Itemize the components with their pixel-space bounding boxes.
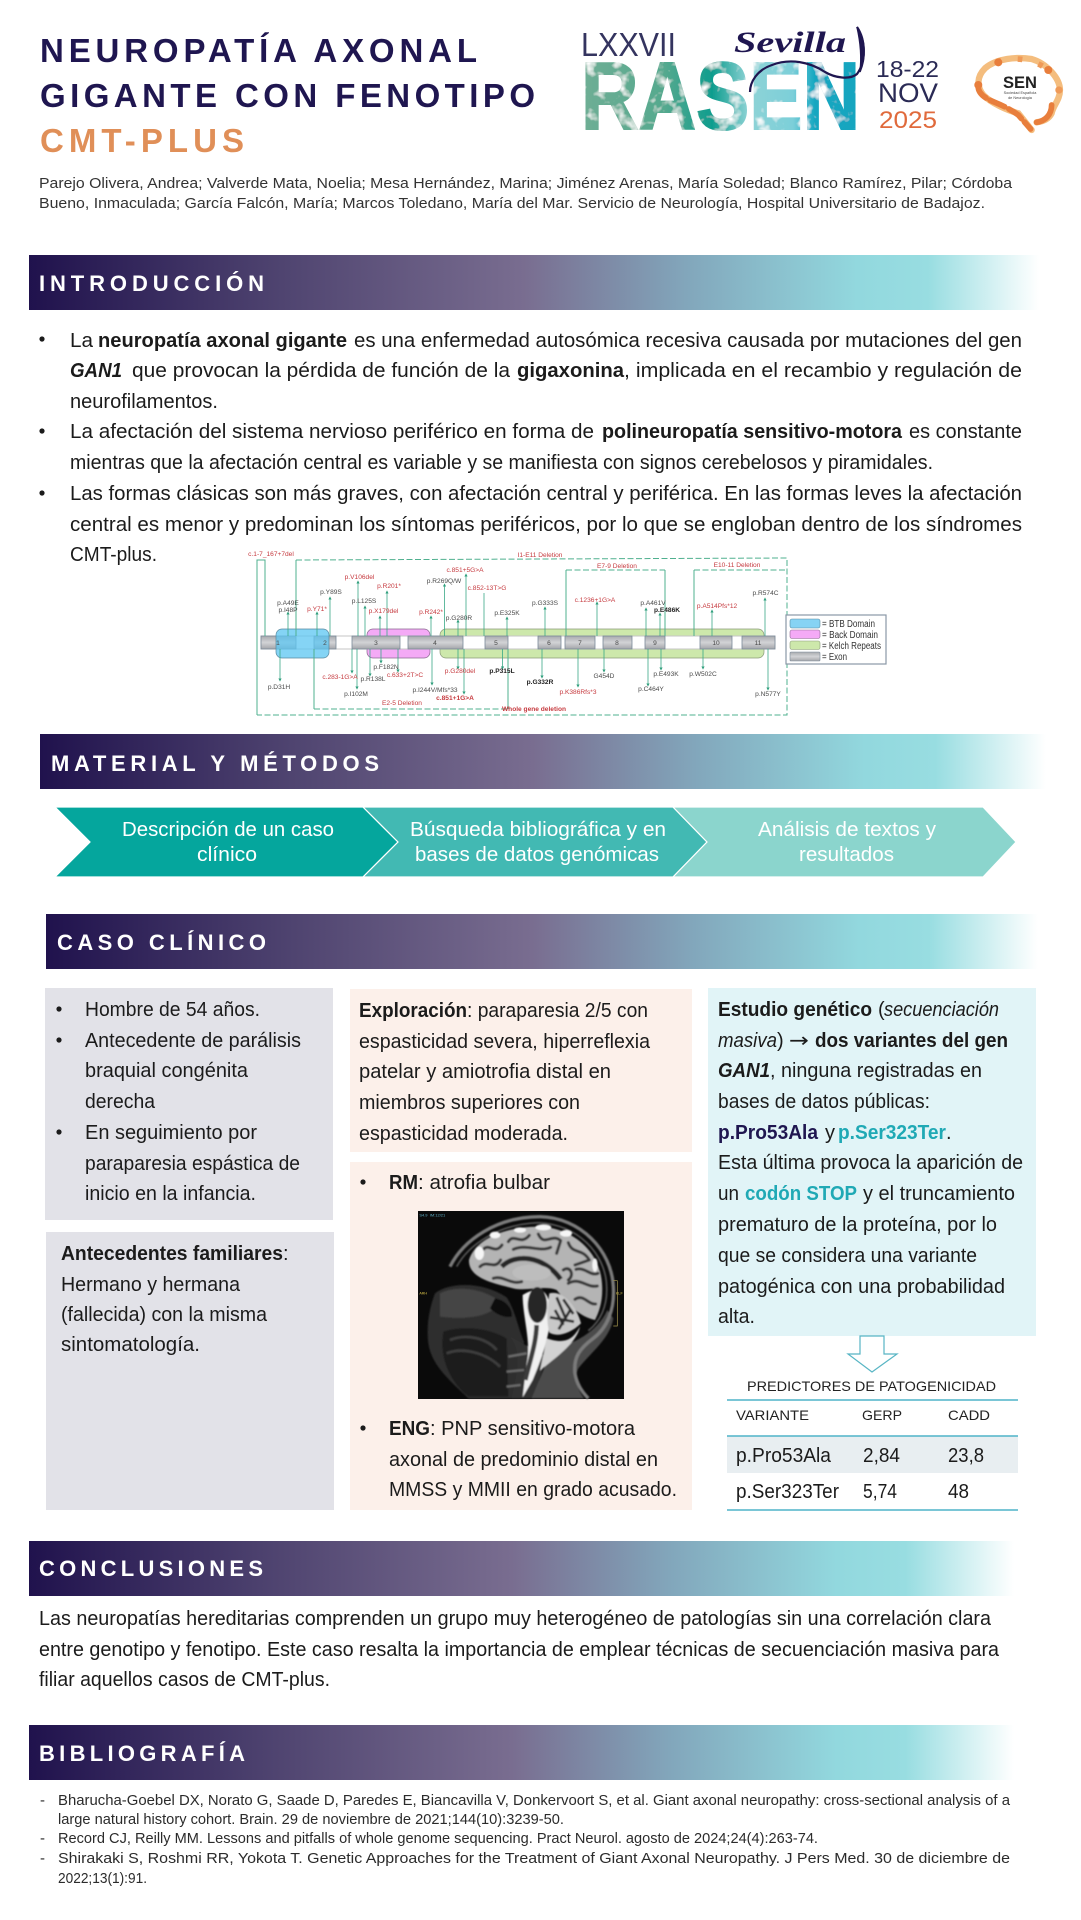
mutation labels: p.L125S [352,598,377,605]
mutation labels: p.E493K [653,671,679,678]
panel: genetic study: GAN1 [718,1060,770,1082]
mutation labels: p.G280R [446,615,472,622]
panel: exploration: patelar y amiotrofia distal en [359,1061,611,1083]
panel: genetic study: alta. [718,1306,755,1328]
mutation labels: c.633+2T>C [387,672,423,679]
heading: Caso clínico: CASO CLÍNICO [57,930,266,955]
mutation labels: p.I244V/Mfs*33 [412,687,458,694]
text block: references: 2022;13(1):91. [58,1870,147,1887]
mutation labels: p.G280del [445,668,476,675]
mutation labels: Whole gene deletion [502,706,566,713]
authors: Bueno, Inmaculada; García Falcón, María; Marcos Toledano, María del Mar. Servicio de Neurología, Hospital Universitario de Badajoz. [39,195,985,212]
bracket verticals [257,560,694,715]
logo: LXXVII RASEN Sevilla congress: NOV [878,78,938,108]
mutation labels: E2-5 Deletion [382,700,422,707]
exon numbers: 1 [276,640,280,647]
mutation labels: E7-9 Deletion [597,563,637,570]
legend [786,615,886,664]
legend: = Exon [822,652,847,663]
panel: genetic study: secuenciación [884,999,999,1021]
chevron 2 [363,807,707,877]
chevron 3: Análisis de textos y [758,818,937,841]
bullet 1: , implicada en el recambio y regulación de [624,360,1022,382]
bullet 3: CMT-plus. [70,544,157,566]
panel: genetic study: y el truncamiento [863,1183,1015,1205]
mutation labels: p.V106del [345,574,375,581]
scan annotations: S4.9 IM:12/21 [419,1213,446,1218]
chevron 2: Búsqueda bibliográfica y en [410,818,666,841]
panel: imaging and ENG [350,1162,692,1510]
gyri [480,1234,598,1304]
mutation arrows below gene [280,649,768,693]
exon numbers: 5 [494,640,498,647]
mutation labels: c.852-13T>G [468,585,506,592]
bullet 1: neuropatía axonal gigante [98,330,347,352]
panel: genetic study: ( [878,999,885,1021]
table: pathogenicity predictors: p.Pro53Ala [736,1445,832,1467]
panel: genetic study: codón STOP [745,1183,857,1205]
face and soft tissue [428,1285,524,1398]
panel: patient history: Antecedente de parálisis [85,1030,301,1052]
panel: genetic study: p.Ser323Ter [838,1122,946,1144]
exon numbers: 3 [374,640,378,647]
table: pathogenicity predictors: 48 [948,1481,969,1503]
panel: exploration: espasticidad moderada. [359,1123,568,1145]
text block: references: Shirakaki S, Roshmi RR, Yokota T. Genetic Approaches for the Treatment of Giant Axonal Neuropathy. J Pers Med. 30 de diciembre de [58,1850,1010,1867]
mutation labels: p.G333S [532,600,559,607]
panel: patient history: braquial congénita [85,1060,249,1082]
authors: Parejo Olivera, Andrea; Valverde Mata, Noelia; Mesa Hernández, Marina; Jiménez Arenas, María Soledad; Blanco Ramírez, Pilar; Córdoba [39,175,1013,192]
bullet 3: central es menor y predominan los síntomas periféricos, por lo que se engloban dentro de los síndromes [70,514,1022,536]
mutation labels: G454D [594,673,615,680]
panel: family history: Hermano y hermana [61,1274,241,1296]
mutation labels: p.P315L [489,668,515,675]
text block: references: large natural history cohort. Brain. 29 de noviembre de 2021;144(10):3239-50. [58,1811,564,1828]
mutation labels: p.F182N [373,664,399,671]
panel: exploration: espasticidad severa, hiperreflexia [359,1031,651,1053]
bullet 2: es constante [909,421,1022,443]
mutation labels: p.I102M [344,691,368,698]
panel: patient history: inicio en la infancia. [85,1183,256,1205]
exon numbers: 4 [433,640,437,647]
panel: patient history: Hombre de 54 años. [85,999,260,1021]
table: pathogenicity predictors: 2,84 [863,1445,900,1467]
panel: family history [46,1232,334,1510]
mutation labels: p.R574C [752,590,779,597]
mutation labels: c.1-7_167+7del [248,551,294,558]
mutation labels: p.A514Pfs*12 [697,603,737,610]
logo: SEN brain: SEN [1003,74,1037,92]
MRI image: sagittal brain: ARH [419,1292,427,1296]
text block: references: - [40,1830,45,1847]
MRI image: sagittal brain [418,1211,624,1399]
scalp [450,1217,614,1398]
mutation labels: p.D31H [268,684,290,691]
logo: LXXVII RASEN Sevilla congress: 2025 [879,107,937,134]
mutation labels: p.E486K [654,607,680,614]
mutation labels: c.851+1G>A [436,695,474,702]
authors [39,175,1013,212]
panel: genetic study: → [789,1028,809,1052]
title: NEUROPATÍA AXONAL [40,32,477,69]
panel: genetic study: prematuro de la proteína, por lo [718,1214,997,1236]
panel: exploration: Exploración [359,1000,467,1022]
chevron 2: bases de datos genómicas [415,843,659,866]
bullet 1: GAN1 [70,360,122,382]
mutation labels: p.R138L [361,676,386,683]
panel: exploration: miembros superiores con [359,1092,580,1114]
text block: references [40,1792,1011,1887]
table: pathogenicity predictors: p.Ser323Ter [736,1481,839,1503]
mutation labels: c.851+5G>A [446,567,484,574]
ENG text: MMSS y MMII en grado acusado. [389,1479,677,1501]
ENG text: axonal de predominio distal en [389,1449,658,1471]
heading: Introducción: INTRODUCCIÓN [39,271,264,296]
table: pathogenicity predictors: GERP [862,1407,902,1423]
panel: genetic study: Esta última provoca la aparición de [718,1152,1023,1174]
text block: references: - [40,1850,45,1867]
panel: genetic study: ) [777,1030,784,1052]
table: pathogenicity predictors: 23,8 [948,1445,984,1467]
text block: conclusions: filiar aquellos casos de CMT-plus. [39,1669,330,1691]
panel: exploration [350,989,692,1152]
table: pathogenicity predictors [727,1378,1018,1510]
panel: genetic study: dos variantes del gen [815,1030,1008,1052]
table: pathogenicity predictors: PREDICTORES DE PATOGENICIDAD [747,1378,996,1394]
panel: family history: : [283,1243,289,1265]
exon numbers: 11 [755,640,762,647]
exon numbers: 2 [323,640,327,647]
text block: references: - [40,1792,45,1809]
process chevrons [55,807,1016,877]
mutation labels: p.Y71* [307,606,327,613]
bullet 3: Las formas clásicas son más graves, con afectación central y periférica. En las formas leves la afectación [70,483,1022,505]
panel: family history: Antecedentes familiares [61,1243,283,1265]
panel: genetic study: un [718,1183,739,1205]
cerebellum [547,1293,581,1335]
panel: patient history [45,988,333,1220]
exons [261,636,775,649]
panel: patient history: paraparesia espástica de [85,1153,300,1175]
exon numbers: 10 [712,640,720,647]
panel: genetic study: masiva [718,1030,777,1052]
mutation labels: p.A49E [277,600,299,607]
panel: genetic study: . [946,1122,952,1144]
bullet 1: gigaxonina [517,360,625,382]
panel: patient history: En seguimiento por [85,1122,257,1144]
panel: family history: (fallecida) con la misma [61,1304,268,1326]
mutation labels: p.A461V [640,600,666,607]
mutation labels: p.R201* [377,583,401,590]
table: pathogenicity predictors: 5,74 [863,1481,897,1503]
mutation labels: p.E325K [494,610,520,617]
heading: Material y métodos: MATERIAL Y MÉTODOS [51,751,379,776]
mutation labels: c.1236+1G>A [575,597,616,604]
panel: genetic study: bases de datos públicas: [718,1091,930,1113]
bullet 1 [39,330,1022,413]
mutation labels: p.R242* [419,609,443,616]
panel: genetic study: p.Pro53Ala [718,1122,819,1144]
panel: genetic study: Estudio genético [718,999,872,1021]
heading: Bibliografía [29,1725,1014,1780]
text block: conclusions [39,1608,1000,1691]
logo: LXXVII RASEN Sevilla congress: 18-22 [876,56,939,82]
logo: LXXVII RASEN Sevilla congress: LXXVII [581,26,676,63]
panel: genetic study: que se considera una variante [718,1245,977,1267]
text block: conclusions: entre genotipo y fenotipo. Este caso resalta la importancia de emplear técnicas de secuenciación masiva para [39,1639,1000,1661]
heading: Caso clínico [46,914,1038,969]
panel: genetic study [708,988,1036,1336]
CSF and brainstem [523,1290,551,1397]
panel: genetic study: y [825,1122,835,1144]
bullet 2: mientras que la afectación central es variable y se manifiesta con signos cerebelosos y piramidales. [70,452,933,474]
chart: GAN1 gene mutation diagram [248,551,886,715]
RM text [360,1172,550,1194]
spine discs [507,1353,527,1387]
legend: = BTB Domain [822,619,875,630]
MRI image: sagittal brain: KLF [616,1292,623,1296]
bullet 2: polineuropatía sensitivo-motora [602,421,903,443]
heading: Material y métodos [40,734,1046,789]
mutation labels: p.W502C [689,671,717,678]
mutation labels: I1-E11 Deletion [518,552,563,559]
chevron 1: Descripción de un caso [122,818,334,841]
mutation labels [248,551,781,713]
text block: references: Record CJ, Reilly MM. Lessons and pitfalls of whole genome sequencing. Pract Neurol. agosto de 2024;24(4):263-74. [58,1830,818,1847]
bullet 2 [39,421,1022,474]
panel: family history: sintomatología. [61,1334,200,1356]
ENG text: : PNP sensitivo-motora [430,1418,636,1440]
mutation labels: p.I48P [278,607,298,614]
corpus callosum [502,1258,561,1279]
panel: patient history: derecha [85,1091,156,1113]
bullet 1: que provocan la pérdida de función de la [132,360,511,382]
exon numbers: 7 [578,640,582,647]
heading: Conclusiones [29,1541,1014,1596]
logo: SEN brain: de Neurología [1008,96,1033,100]
mutation labels: c.283-1G>A [322,674,358,681]
exon numbers [276,640,762,647]
arrow: down to predictors table [848,1336,897,1372]
mutation labels: p.C464Y [638,686,664,693]
gene domains [261,629,775,658]
heading: Introducción [29,255,1039,310]
heading: Conclusiones: CONCLUSIONES [39,1556,263,1581]
ENG text [360,1418,677,1501]
title [40,32,535,159]
text block: references: Bharucha-Goebel DX, Norato G, Saade D, Paredes E, Biancavilla V, Donkervoort S, et al. Giant axonal neuropathy: cross-sectional analysis of a [58,1792,1011,1809]
chevron 3: resultados [799,843,894,866]
table: pathogenicity predictors: CADD [948,1407,990,1423]
panel: genetic study: patogénica con una probabilidad [718,1276,1005,1298]
chevron 3 [673,807,1016,877]
ENG text: ENG [389,1418,430,1440]
deletion brackets [257,558,787,715]
title: CMT-PLUS [40,122,244,159]
RM text: : atrofia bulbar [418,1172,550,1194]
logo: LXXVII RASEN Sevilla congress: Sevilla [734,26,846,59]
mutation labels: p.Y89S [320,589,342,596]
heading: Bibliografía: BIBLIOGRAFÍA [39,1741,245,1766]
RM text: RM [389,1172,418,1194]
bullet 2: La afectación del sistema nervioso periférico en forma de [70,421,594,443]
logo: SEN brain: Sociedad Española [1004,91,1037,95]
title: GIGANTE CON FENOTIPO [40,77,535,114]
panel: exploration: : paraparesia 2/5 con [467,1000,648,1022]
logo: LXXVII RASEN Sevilla congress: RASEN [581,43,860,150]
chevron 1: clínico [197,843,257,866]
text block: conclusions: Las neuropatías hereditarias comprenden un grupo muy heterogéneo de patologías sin una correlación clara [39,1608,992,1630]
exon numbers: 9 [653,640,657,647]
neck [510,1337,547,1398]
bullet 1: es una enfermedad autosómica recesiva causada por mutaciones del gen [354,330,1022,352]
logo: SEN brain [974,58,1063,130]
chevron 1 [55,807,398,877]
mutation labels: p.G332R [527,679,554,686]
mutation labels: p.K386Rfs*3 [559,689,597,696]
legend: = Back Domain [822,630,878,641]
panel: genetic study: , ninguna registradas en [770,1060,982,1082]
bullet 3 [39,483,1022,566]
bullet 1: La [70,330,94,352]
text block: introduction bullets [39,330,1022,566]
legend: = Kelch Repeats [822,641,881,652]
table: pathogenicity predictors: VARIANTE [736,1407,809,1423]
mutation labels: p.X179del [369,608,399,615]
mutation labels: p.R269Q/W [427,578,462,585]
BTB domain [276,629,329,658]
mutation arrows above gene [288,575,765,636]
exon numbers: 8 [615,640,619,647]
brain [469,1227,602,1320]
mutation labels: p.N577Y [755,691,781,698]
bullet 1: neurofilamentos. [70,391,218,413]
mutation labels: E10-11 Deletion [714,562,761,569]
exon numbers: 6 [547,640,551,647]
